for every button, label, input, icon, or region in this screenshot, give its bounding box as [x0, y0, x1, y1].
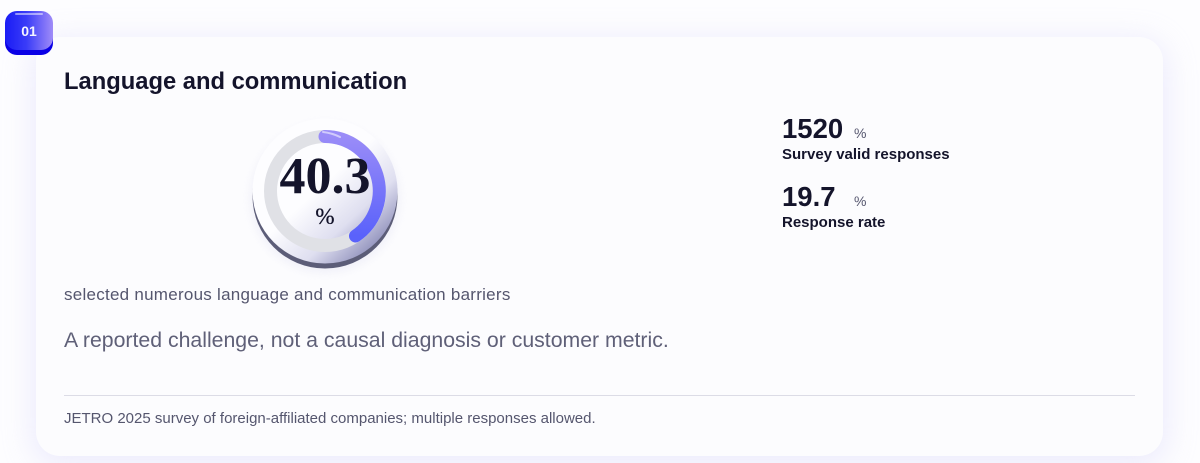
source footnote: JETRO 2025 survey of foreign-affiliated companies; multiple responses allowed. [64, 410, 596, 427]
donut caption: selected numerous language and communication barriers [64, 285, 511, 304]
stat: response rate: % [854, 193, 866, 209]
heading: Language and communication [64, 68, 407, 95]
note: A reported challenge, not a causal diagnosis or customer metric. [64, 328, 669, 352]
stat: survey responses [782, 113, 950, 163]
donut value: 40.3 [280, 148, 370, 205]
badge: 01: 01 [21, 23, 37, 39]
stat: survey responses: % [854, 125, 866, 141]
stat: response rate: 19.7 [782, 181, 836, 212]
stat: response rate [782, 181, 885, 231]
stat: response rate: Response rate [782, 214, 885, 231]
stat: survey responses: 1520 [782, 113, 843, 144]
donut unit: % [315, 204, 335, 229]
donut chart: 40.3 percent [252, 130, 398, 270]
badge: 01 [5, 11, 53, 55]
stat: survey responses: Survey valid responses [782, 146, 950, 163]
